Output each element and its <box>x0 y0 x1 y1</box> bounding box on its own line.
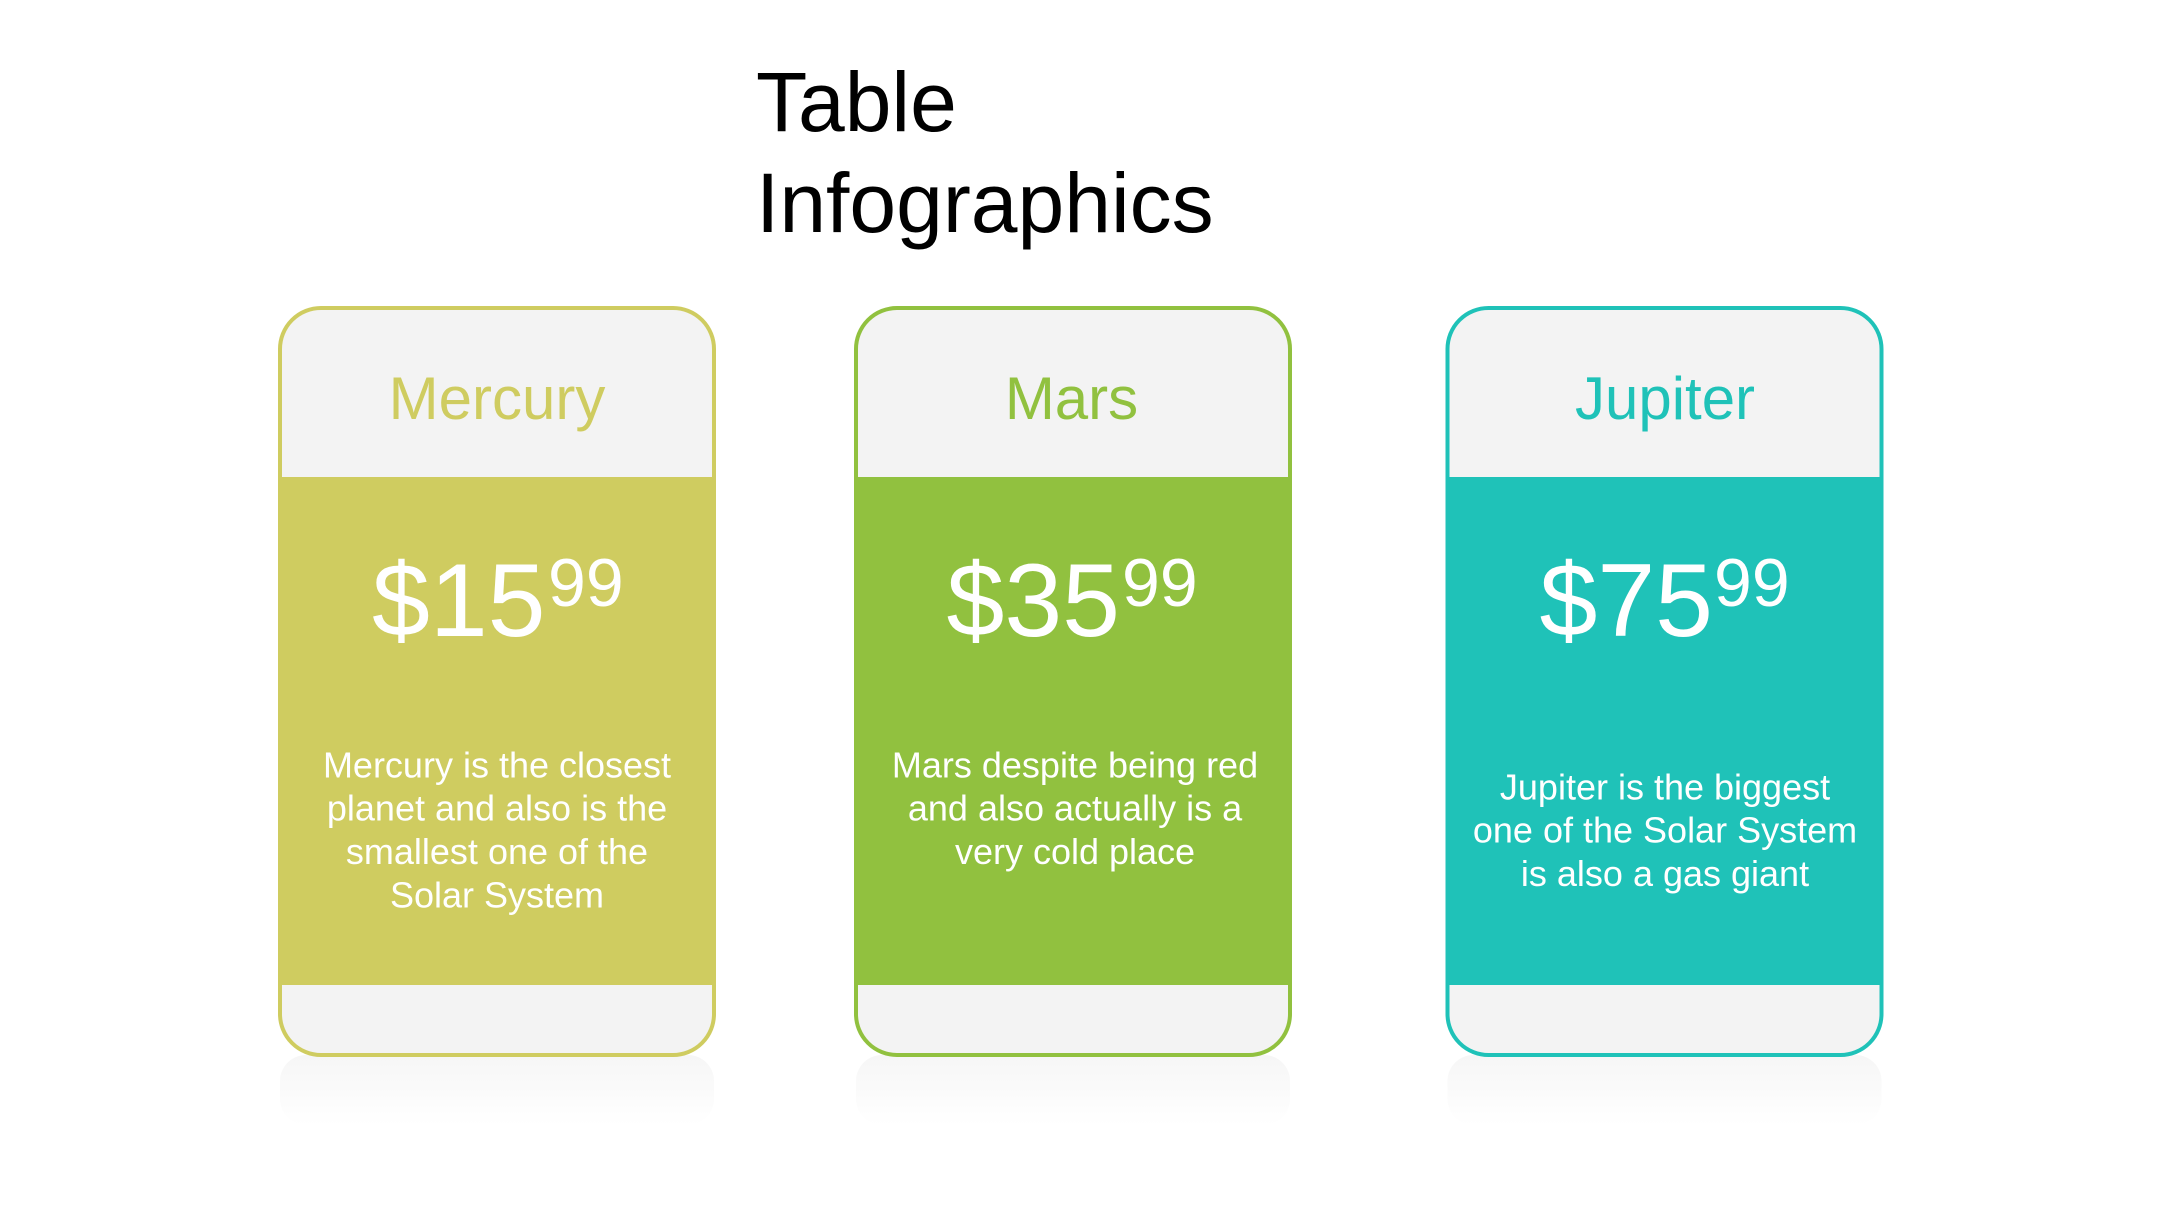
price: Mars: $35 <box>946 543 1120 659</box>
price: Mercury <box>372 543 624 659</box>
card background: Mars <box>856 308 1290 1055</box>
title: Table <box>756 55 957 149</box>
description: Mercury: smallest one of the <box>346 831 648 872</box>
panel: Mars <box>854 308 1292 1125</box>
card reflection: Jupiter <box>1448 1055 1882 1125</box>
card background: Jupiter <box>1448 308 1882 1055</box>
price: Jupiter <box>1540 543 1790 659</box>
description: Jupiter <box>1473 766 1857 894</box>
price band: Mercury <box>278 477 716 985</box>
panel: Jupiter <box>1446 308 1884 1125</box>
description: Mars <box>892 744 1258 872</box>
panel: Mercury <box>278 308 716 1125</box>
description: Jupiter: one of the Solar System <box>1473 810 1857 850</box>
description: Mars: and also actually is a <box>908 788 1243 829</box>
heading: Mars: Mars <box>1005 365 1138 432</box>
price: Mars <box>946 543 1198 659</box>
title: Infographics <box>756 156 1214 250</box>
price band: Mars <box>854 477 1292 985</box>
description: Jupiter: Jupiter is the biggest <box>1500 766 1830 807</box>
price: Jupiter: 99 <box>1714 545 1790 621</box>
price band: Jupiter <box>1446 477 1884 985</box>
description: Mercury <box>323 744 671 915</box>
card reflection: Mars <box>856 1055 1290 1125</box>
price: Jupiter: $75 <box>1540 543 1713 659</box>
heading: Mercury: Mercury <box>389 365 605 432</box>
heading: Jupiter: Jupiter <box>1575 365 1755 432</box>
card background: Mercury <box>280 308 714 1055</box>
price: Mars: 99 <box>1122 545 1198 621</box>
price: Mercury: 99 <box>548 545 624 621</box>
price: Mercury: $15 <box>372 543 546 659</box>
card reflection: Mercury <box>280 1055 714 1125</box>
description: Mercury: Solar System <box>390 874 604 915</box>
description: Mars: very cold place <box>955 831 1195 872</box>
description: Jupiter: is also a gas giant <box>1521 853 1809 894</box>
description: Mars: Mars despite being red <box>892 744 1258 786</box>
description: Mercury: Mercury is the closest <box>323 744 671 786</box>
title <box>756 55 1214 250</box>
description: Mercury: planet and also is the <box>327 788 667 829</box>
